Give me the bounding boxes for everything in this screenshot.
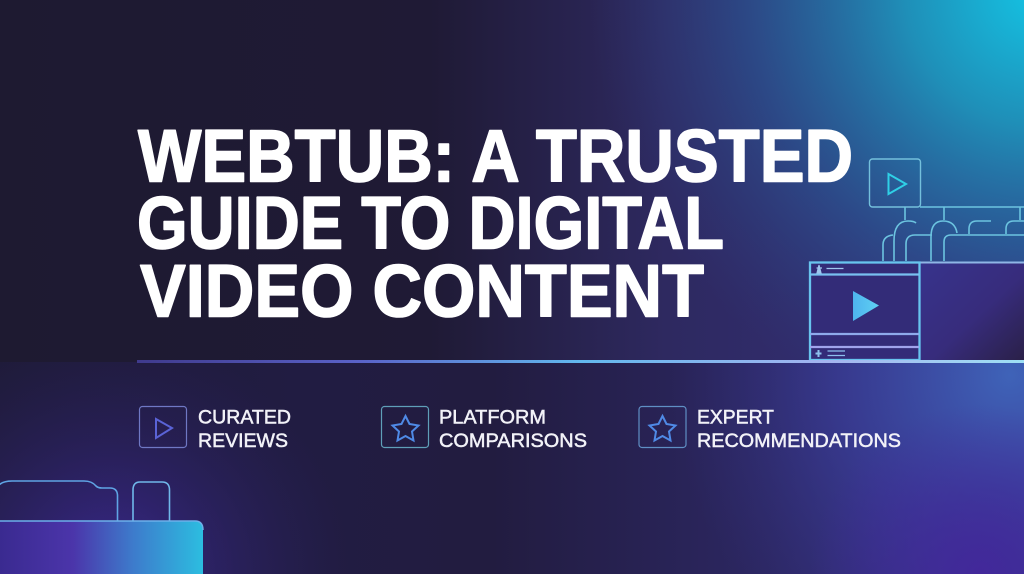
- icon: play triangle: [853, 291, 879, 321]
- feature: curated reviews: [140, 406, 291, 452]
- title: VIDEO CONTENT: [140, 250, 704, 332]
- card outline: [133, 482, 170, 521]
- panel: dark box right: [919, 263, 1024, 360]
- feature: platform comparisons: [382, 406, 587, 452]
- title: GUIDE TO DIGITAL: [137, 182, 724, 264]
- label: COMPARISONS: [439, 430, 587, 452]
- icon: star box: [382, 406, 428, 448]
- label: CURATED: [198, 406, 291, 428]
- label: [439, 406, 587, 452]
- label: EXPERT: [697, 406, 774, 428]
- illustration: video network: [810, 159, 1024, 360]
- tablet body: [0, 521, 203, 574]
- label: RECOMMENDATIONS: [697, 430, 901, 452]
- title: [137, 114, 853, 332]
- background upper band: [0, 0, 1024, 362]
- icon: star box: [639, 406, 686, 448]
- panel: video player window: [810, 262, 920, 360]
- label: [198, 406, 291, 452]
- horizontal rule: [137, 360, 1024, 363]
- illustration: tablet and folder bottom left: [0, 481, 203, 574]
- background lower band: [0, 362, 1024, 574]
- window bottom bar details: [816, 350, 822, 357]
- label: REVIEWS: [198, 430, 288, 452]
- folder outline: [0, 481, 118, 521]
- label: PLATFORM: [439, 406, 546, 428]
- feature: expert recommendations: [639, 406, 901, 452]
- window top bar details: [816, 265, 822, 273]
- icon: floating play box: [870, 159, 920, 207]
- connector lines: [883, 207, 1024, 261]
- label: [697, 406, 901, 452]
- title: WEBTUB: A TRUSTED: [138, 114, 853, 198]
- icon: play box: [140, 406, 186, 448]
